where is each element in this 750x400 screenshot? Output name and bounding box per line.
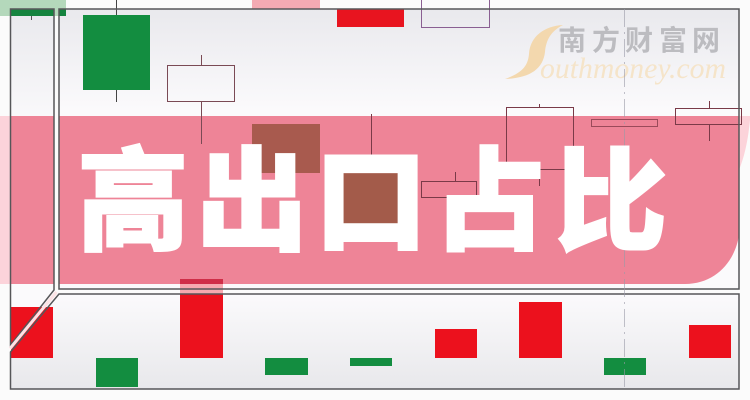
candlestick chart [0, 0, 742, 228]
diagonal gap highlight [10, 292, 56, 348]
watermark domain: outhmoney.com [540, 52, 726, 85]
watermark Chinese name: 南方财富网 [558, 24, 720, 56]
watermark: southmoney logo [505, 24, 726, 85]
volume bars [11, 279, 731, 387]
dashed cursor line [624, 9, 626, 390]
icon: logo swoosh [505, 25, 563, 79]
title: 高出口占比 [77, 140, 667, 265]
pink title band [0, 116, 750, 284]
